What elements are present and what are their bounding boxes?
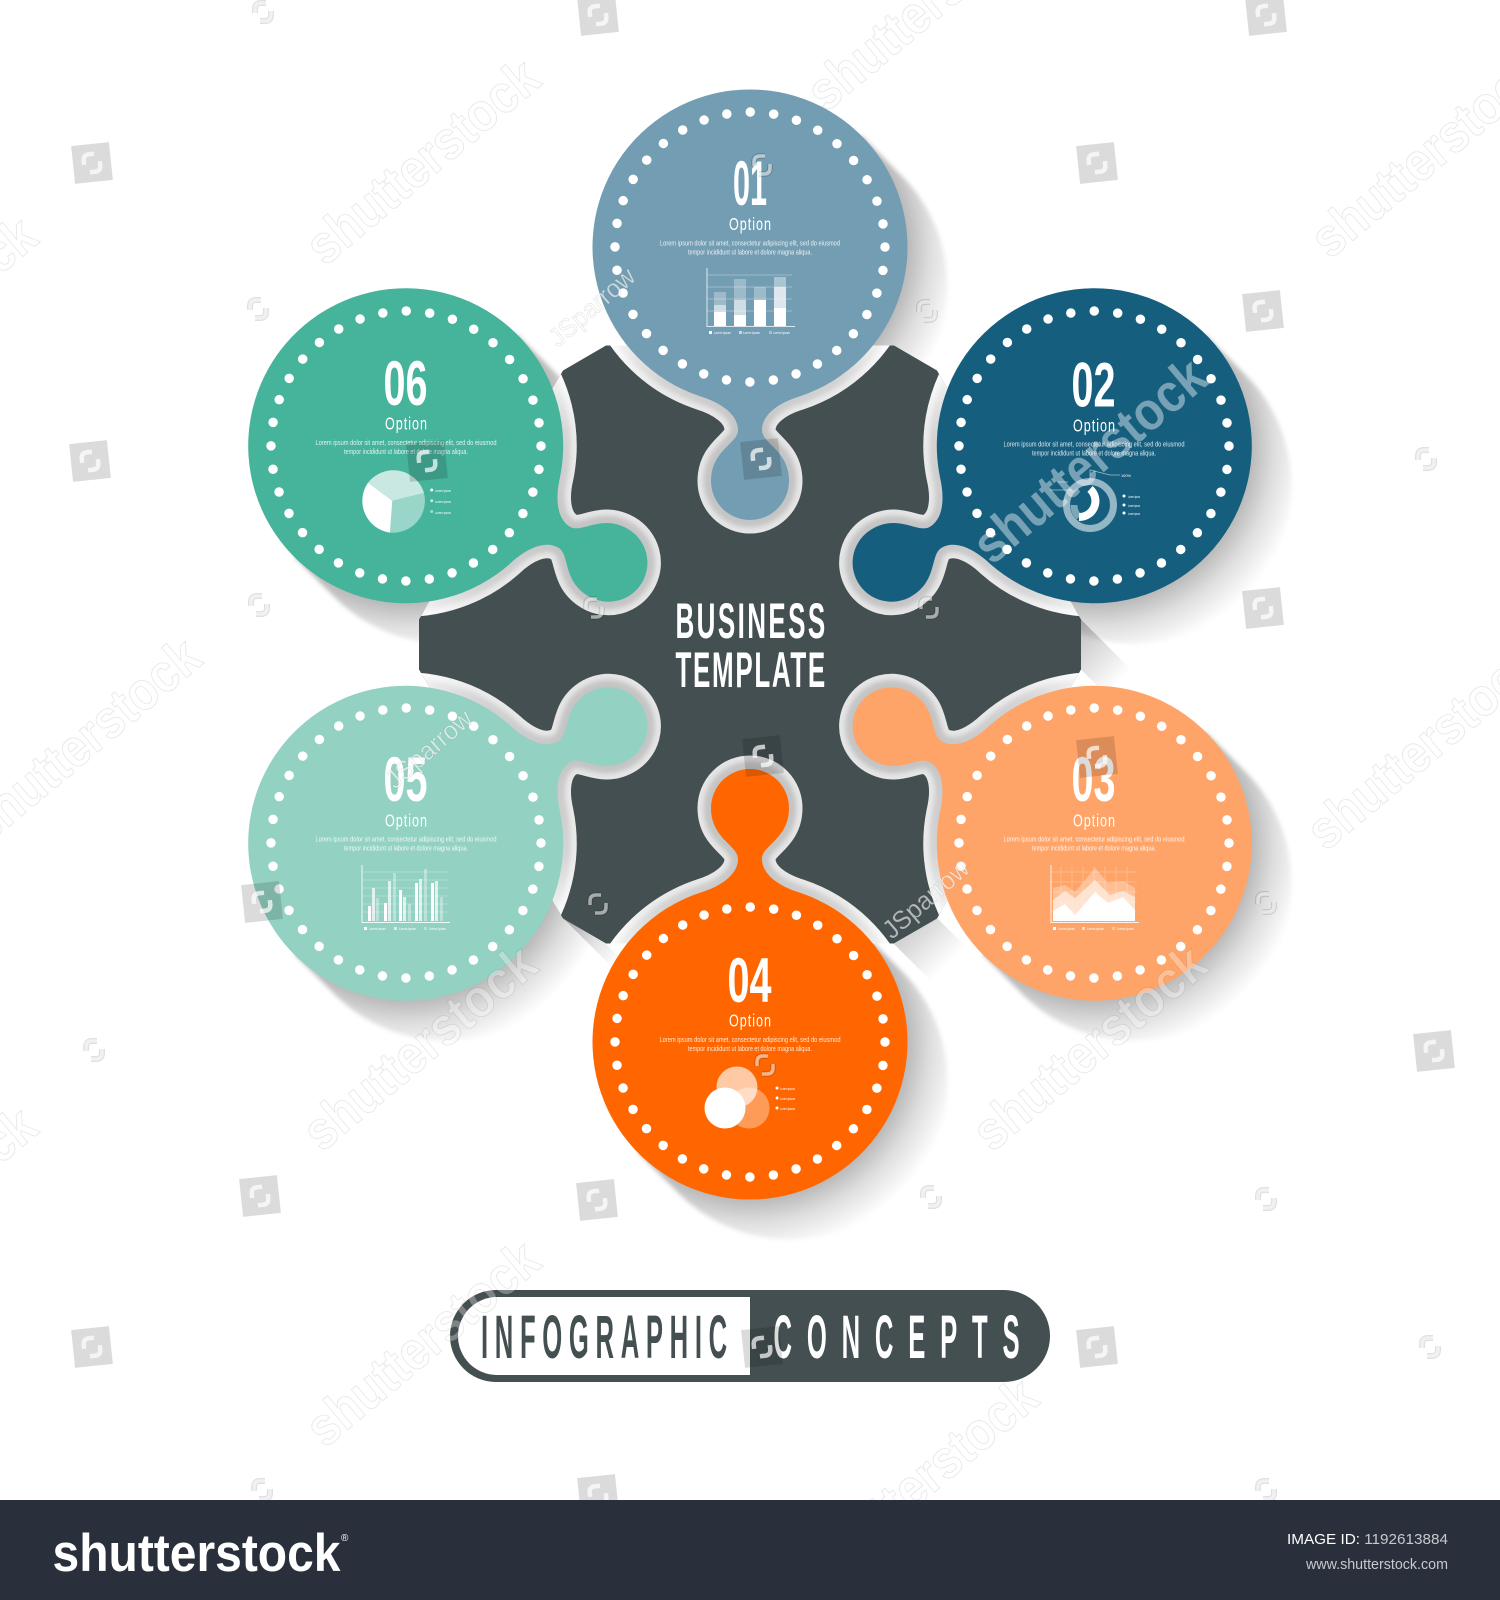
central title: TEMPLATE (676, 643, 825, 698)
bar chart 05: Lorem ipsum (399, 926, 416, 931)
body text 05 (316, 835, 496, 853)
area chart 03: Lorem ipsum (1087, 926, 1104, 931)
piece shape 01 (593, 89, 908, 520)
body text 05: Lorem ipsum dolor sit amet, consectetur adipiscing elit, sed do eiusmod (316, 835, 496, 844)
venn chart 04: Lorem ipsum (780, 1086, 795, 1091)
pie chart 06: Lorem ipsum (435, 499, 451, 504)
body text 01: tempor incididunt ut labore et dolore magna aliqua. (688, 248, 812, 257)
pie chart 06: Lorem ipsum (435, 488, 451, 493)
number 04: 04 (728, 946, 772, 1016)
venn chart 04: Lorem ipsum (780, 1096, 795, 1101)
piece shape 03 (779, 570, 1309, 1058)
number 05: 05 (384, 745, 428, 815)
donut chart 02: Lorem ipsum (1128, 511, 1140, 516)
pie chart 06: Lorem ipsum (435, 510, 451, 515)
body text 06: Lorem ipsum dolor sit amet, consectetur adipiscing elit, sed do eiusmod (316, 438, 496, 447)
panel: option 06 (191, 231, 721, 719)
number 06: 06 (384, 349, 428, 419)
pie chart 06 (362, 470, 451, 533)
venn chart 04: Lorem ipsum (780, 1106, 795, 1111)
body text 01 (660, 239, 840, 257)
area chart 03: Lorem ipsum (1058, 926, 1075, 931)
panel: option 02 (779, 231, 1309, 719)
area chart 03 (1051, 865, 1139, 931)
body text 04: Lorem ipsum dolor sit amet, consectetur adipiscing elit, sed do eiusmod (660, 1035, 840, 1044)
panel: option 05 (191, 570, 721, 1058)
bar chart 05: Lorem ipsum (369, 926, 386, 931)
footer registered mark: ® (341, 1533, 349, 1544)
central dark hub (419, 346, 1081, 944)
body text 04: tempor incididunt ut labore et dolore magna aliqua. (688, 1044, 812, 1053)
dotted ring 04 (615, 907, 885, 1177)
dotted ring 01 (615, 112, 885, 382)
piece shape 05 (191, 570, 721, 1058)
number 03: 03 (1072, 745, 1116, 815)
long shadows of circles and hub arms (295, 136, 1292, 1240)
body text 02: Lorem ipsum dolor sit amet, consectetur adipiscing elit, sed do eiusmod (1004, 440, 1184, 449)
watermarks: shutterstock (792, 1365, 1050, 1595)
bar chart 01: Lorem ipsum (714, 330, 731, 335)
footer logo: shutterstock (52, 1524, 341, 1583)
body text 06 (316, 438, 496, 456)
bar chart 01: Lorem ipsum (743, 330, 760, 335)
heading 04: Option (729, 1011, 771, 1031)
central title (676, 594, 825, 698)
body text 02: tempor incididunt ut labore et dolore magna aliqua. (1032, 449, 1156, 458)
heading 01: Option (729, 215, 771, 235)
heading 02: Option (1073, 417, 1115, 436)
body text 04 (660, 1035, 840, 1053)
footer bar (0, 1500, 1500, 1600)
venn chart 04 (704, 1066, 795, 1128)
body text 06: tempor incididunt ut labore et dolore magna aliqua. (344, 447, 468, 456)
panel: option 01: 01 (733, 149, 767, 219)
body text 05: tempor incididunt ut labore et dolore magna aliqua. (344, 844, 468, 853)
heading 06: Option (385, 415, 427, 434)
heading 03: Option (1073, 811, 1115, 831)
bar chart 01: Lorem ipsum (773, 330, 790, 335)
panel: option 03 (779, 570, 1309, 1058)
donut chart 02: Lorem ipsum (1128, 494, 1140, 499)
panel: option 04 (592, 769, 907, 1200)
watermarks: JSparrow (379, 703, 478, 795)
watermarks: JSparrow (542, 261, 641, 353)
watermarks: shutterstock (291, 932, 549, 1162)
body text 03 (1004, 835, 1184, 853)
footer image id: IMAGE ID: 1192613884 (1287, 1531, 1448, 1548)
watermarks: shutterstock (294, 46, 552, 276)
piece shape 06 (191, 231, 721, 719)
watermarks: shutterstock (961, 932, 1219, 1162)
central title: BUSINESS (676, 594, 825, 649)
number 02: 02 (1072, 351, 1116, 421)
body text 02 (1004, 440, 1184, 458)
panel: option 01 (593, 89, 908, 520)
area chart 03: Lorem ipsum (1117, 926, 1134, 931)
watermarks: shutterstock (294, 1228, 552, 1458)
watermarks: JSparrow (876, 853, 975, 945)
donut chart 02: Lorem ipsum (1128, 503, 1140, 508)
heading 05: Option (385, 811, 427, 831)
dotted ring 02 (959, 311, 1229, 581)
footer url: www.shutterstock.com (1305, 1556, 1448, 1573)
grey cut-out outlines around pieces (421, 346, 1079, 944)
label: concepts: CONCEPTS (774, 1303, 1020, 1371)
label: infographic: INFOGRAPHIC (481, 1303, 727, 1371)
dotted ring 05 (271, 708, 541, 978)
bar chart 05 (362, 865, 450, 931)
body text 03: Lorem ipsum dolor sit amet, consectetur adipiscing elit, sed do eiusmod (1004, 835, 1184, 844)
donut chart 02: 100% (1121, 473, 1131, 478)
piece shape 04 (592, 769, 907, 1200)
donut chart 02 (1050, 470, 1140, 528)
body text 03: tempor incididunt ut labore et dolore magna aliqua. (1032, 844, 1156, 853)
bar chart 05: Lorem ipsum (429, 926, 446, 931)
dotted ring 03 (959, 708, 1229, 978)
body text 01: Lorem ipsum dolor sit amet, consectetur adipiscing elit, sed do eiusmod (660, 239, 840, 248)
watermarks: shutterstock (961, 345, 1219, 575)
piece shape 02 (779, 231, 1309, 719)
bar chart 01 (707, 268, 795, 335)
bottom pill: infographic concepts (450, 1290, 1050, 1382)
dotted ring 06 (271, 311, 541, 581)
